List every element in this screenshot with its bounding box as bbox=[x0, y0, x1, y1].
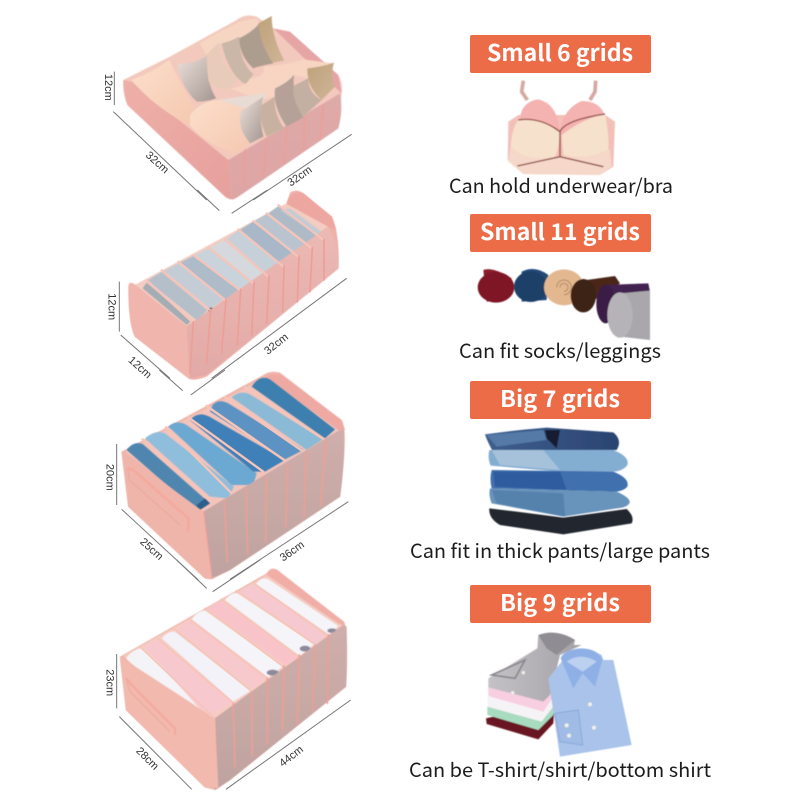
panel: small 11 grids organizer bbox=[105, 190, 347, 381]
heading: Small 11 grids: Small 11 grids bbox=[480, 213, 640, 247]
dimension lines and labels: 36cm bbox=[278, 539, 307, 564]
rolled socks bbox=[143, 206, 323, 325]
dimension lines and labels: 32cm bbox=[262, 331, 291, 357]
organizer body bbox=[120, 569, 347, 790]
bras, back row bbox=[132, 16, 284, 125]
folded blue towels bbox=[127, 378, 335, 512]
dividers bbox=[147, 205, 324, 373]
dimension lines and labels: 12cm bbox=[126, 354, 154, 381]
caption: Can be T-shirt/shirt/bottom shirt bbox=[409, 754, 712, 783]
icon: stack of jeans bbox=[485, 428, 633, 534]
dimension lines and labels: 32cm bbox=[285, 164, 314, 189]
heading: Big 7 grids bbox=[470, 380, 651, 419]
caption: Can hold underwear/bra bbox=[449, 170, 673, 199]
heading: Big 9 grids bbox=[470, 584, 651, 623]
inner dividers bbox=[143, 387, 325, 501]
dimension lines and labels: 12cm bbox=[105, 293, 117, 320]
dimension lines and labels bbox=[103, 560, 351, 789]
dimension lines and labels bbox=[105, 190, 347, 381]
dimension lines and labels: 25cm bbox=[137, 536, 165, 563]
panel: big 7 grids organizer bbox=[103, 370, 348, 580]
dimension lines and labels bbox=[103, 370, 348, 580]
side panel with handle bbox=[120, 657, 218, 788]
mesh front panel bbox=[215, 625, 347, 790]
caption: Can fit socks/leggings bbox=[459, 335, 661, 364]
folded shirts bbox=[126, 578, 338, 726]
dimension lines and labels: 28cm bbox=[133, 745, 161, 773]
dimension lines and labels: 23cm bbox=[103, 669, 115, 696]
icon: rolled leggings bbox=[478, 269, 650, 340]
heading: Small 6 grids: Small 6 grids bbox=[487, 34, 633, 68]
icon: stack of shirts bbox=[486, 633, 632, 757]
organizer body bbox=[128, 191, 339, 380]
heading: Big 7 grids: Big 7 grids bbox=[500, 380, 620, 414]
dimension lines and labels: 20cm bbox=[103, 464, 115, 491]
pink side and mesh panels bbox=[129, 193, 339, 378]
bras, front row bbox=[190, 59, 335, 154]
icon: bra bbox=[508, 81, 615, 175]
organizer body bbox=[122, 372, 345, 579]
side panel with handle bbox=[122, 452, 212, 578]
organizer body bbox=[123, 16, 342, 199]
mesh front panel bbox=[203, 430, 344, 578]
panel: small 6 grids organizer bbox=[102, 16, 352, 200]
heading: Big 9 grids: Big 9 grids bbox=[500, 584, 620, 618]
panel: big 9 grids organizer bbox=[103, 560, 351, 790]
dimension lines and labels bbox=[102, 72, 352, 200]
inner dividers bbox=[140, 583, 327, 717]
caption: Can fit in thick pants/large pants bbox=[410, 535, 710, 564]
dimension lines and labels: 44cm bbox=[277, 744, 306, 770]
dimension lines and labels: 32cm bbox=[143, 149, 171, 176]
dimension lines and labels: 12cm bbox=[102, 74, 114, 101]
